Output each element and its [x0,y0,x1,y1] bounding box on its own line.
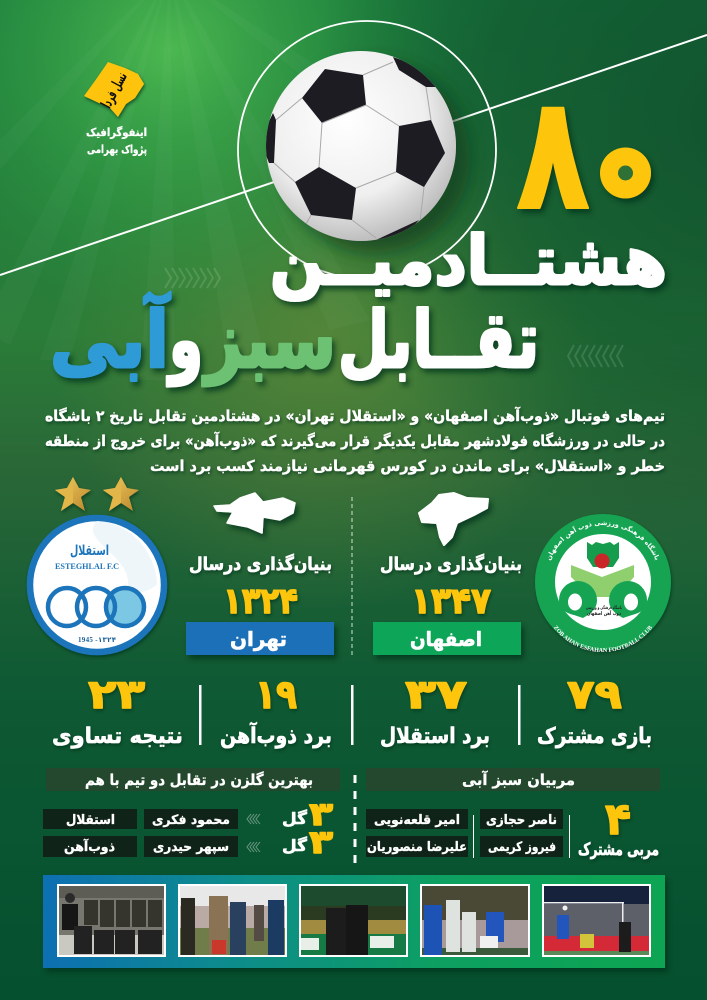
city badge [186,622,334,655]
logo: Zob Ahan: باشگاه فرهنگی و ورزشی [586,604,622,611]
logo mark: نسل فردا [97,69,131,111]
logo: Zob Ahan: باشگاه فرهنگی ورزشی ذوب آهن اصفهان [548,521,659,560]
title: line two [50,292,539,386]
heading [366,768,660,791]
title: number 80: ۰ [612,148,638,194]
scorer row: Heidari: ذوب‌آهن [64,838,115,855]
coach names [366,809,570,858]
scorer row: Fekri: محمود فکری [152,813,230,828]
panel: Zob Ahan info [373,493,522,655]
founding year: ۱۳۲۴ [223,581,298,622]
stat: shared games: بازی مشترک [537,724,652,749]
shared coaches count: ۴ [605,794,631,845]
coach names: امیر قلعه‌نویی [374,813,460,828]
scorer row: Heidari [43,823,334,861]
founding year: ۱۳۴۷ [411,581,491,622]
logo: Nasl-e Farda [84,62,147,156]
panel: coaches [366,768,660,860]
logo: Zob Ahan [535,514,673,654]
logo: Esteghlal: 1945 -۱۳۲۴ [78,636,117,644]
city badge [373,622,521,655]
intro paragraph [45,407,665,475]
decorative chevrons: title right [568,345,623,367]
stat: draws: نتیجه تساوی [52,724,183,749]
photo: penalty save [542,884,651,957]
scorer row: Fekri: ۳ [309,795,334,833]
panel: top scorers [43,768,340,861]
photo band [43,875,665,968]
city badge: تهران [230,627,287,651]
intro paragraph: خطر و «استقلال» برای ماندن در کورس قهرمانی نیازمند کسب برد است [150,457,665,475]
stat: Esteghlal wins: ۳۷ [405,672,467,718]
scorer row: Fekri [43,795,334,833]
title: line two: سبز [202,296,336,386]
decorative chevrons: title left [165,268,220,288]
scorer row: Fekri: گل [282,809,308,828]
title: line two: تقــابل [338,296,539,386]
heading: مربیان سبز آبی [462,771,575,789]
stat: shared games [537,672,652,749]
shared coaches count [578,794,659,860]
logo caption: پژواک بهرامی [87,143,147,156]
founding label: بنیان‌گذاری درسال [189,553,332,575]
logo: Esteghlal [30,518,164,652]
stat: draws: ۲۳ [88,672,145,718]
map: Isfahan province [419,493,488,545]
intro paragraph: تیم‌های فوتبال «ذوب‌آهن اصفهان» و «استقلال تهران» در هشتادمین تقابل تاریخ ۲ باشگاه [45,407,665,425]
soccer ball [260,51,456,241]
stat: Zob Ahan wins [220,672,332,749]
title: line one: هشتــادمیــن [270,222,667,301]
logo: Esteghlal: استقلال [70,543,109,559]
panel: Esteghlal info [186,493,334,655]
scorer row: Heidari: سپهر حیدری [153,840,229,855]
logo: Esteghlal: ESTEGHLAL F.C [55,562,119,571]
title: line two: آبی [50,292,171,386]
logo: Zob Ahan: ZOB AHAN ESFAHAN FOOTBALL CLUB [554,625,652,652]
stat: Esteghlal wins [380,672,490,749]
stat: Zob Ahan wins: ۱۹ [255,672,297,718]
scorer row: Heidari: گل [282,836,308,855]
logo: Zob Ahan: ذوب آهن اصفهان [587,609,621,617]
photo: officials on pitch [178,884,287,957]
title: number 80: ۸ [516,62,590,246]
stat: Esteghlal wins: برد استقلال [380,724,490,749]
stat: Zob Ahan wins: برد ذوب‌آهن [220,721,332,749]
city badge: اصفهان [410,627,482,651]
logo caption: اینفوگرافیک [86,126,147,139]
scorer row: Heidari: ۳ [309,823,334,861]
logo caption [86,126,147,156]
title: line two: و [166,296,203,386]
stat: shared games: ۷۹ [567,672,622,718]
photo: goalkeeper embrace [299,884,408,957]
shared coaches count: مربی مشترک [578,840,659,860]
stat: draws [52,672,183,749]
map: Tehran province [214,493,295,533]
stars [55,477,139,511]
heading [46,768,340,791]
coach names: علیرضا منصوریان [367,840,467,855]
heading: بهترین گلزن در تقابل دو تیم با هم [85,771,313,789]
scorer row: Fekri: استقلال [66,813,115,828]
photo: 1960s team [57,884,166,957]
coach names: ناصر حجازی [486,813,557,828]
photo: match action [420,884,530,957]
founding label: بنیان‌گذاری درسال [380,553,522,575]
coach names: فیروز کریمی [488,840,556,855]
